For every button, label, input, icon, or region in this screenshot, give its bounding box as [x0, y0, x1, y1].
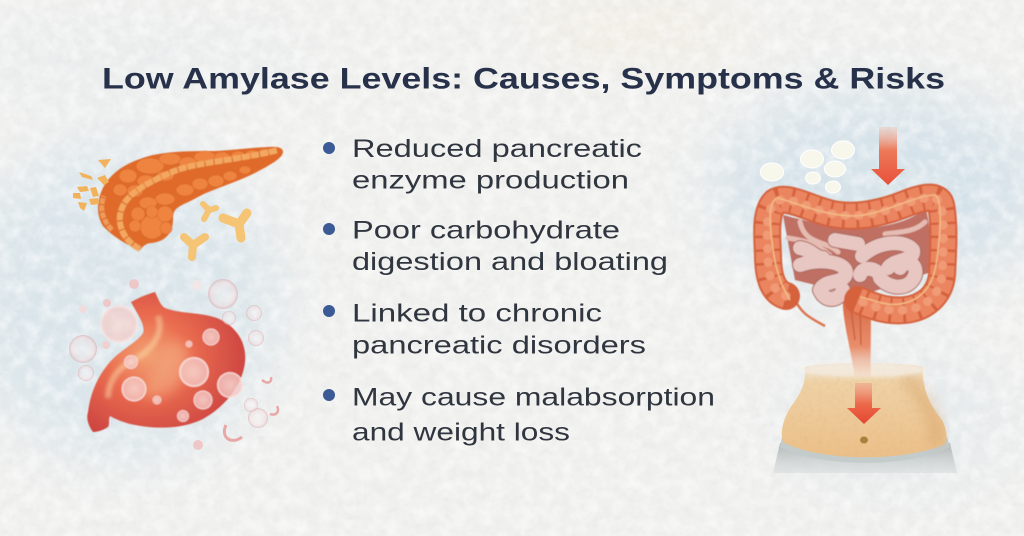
inner cavity [783, 208, 937, 296]
icon: abdomen [773, 363, 957, 473]
icon: enzyme fragments [73, 159, 111, 211]
bullet: enzyme production [323, 135, 642, 194]
bullet list [323, 135, 715, 446]
icon: pancreas [98, 147, 283, 250]
stomach bubbles [122, 328, 243, 422]
small intestine [788, 222, 925, 299]
floating bubbles [69, 279, 278, 450]
icon: intestines [767, 195, 943, 378]
rectum [843, 300, 871, 378]
icon: Y antibodies [184, 204, 247, 257]
bullet: malabsorption: May cause malabsorption [352, 384, 715, 412]
bullet: carbohydrate digestion [323, 216, 668, 276]
bullet: enzyme production: enzyme production [352, 166, 629, 194]
bullet: carbohydrate digestion: digestion and bloating [352, 248, 668, 276]
appendix [792, 294, 825, 326]
bullet: malabsorption [323, 384, 715, 446]
title: Low Amylase Levels: Causes, Symptoms & Risks [102, 62, 945, 96]
right Y [223, 213, 247, 238]
arrow: lower [847, 383, 881, 424]
icon: white particles [760, 141, 854, 193]
bullet: carbohydrate digestion: Poor carbohydrate [352, 216, 620, 244]
lobules [113, 148, 271, 239]
icon: stomach [87, 292, 245, 432]
lower Y [184, 237, 205, 257]
bullet: chronic disorders: pancreatic disorders [352, 332, 646, 360]
small Y [203, 204, 216, 219]
duct [120, 150, 278, 249]
bullet: chronic disorders [323, 300, 646, 360]
bullet: malabsorption: and weight loss [352, 418, 570, 446]
bullet: enzyme production: Reduced pancreatic [352, 135, 642, 163]
waistband [773, 443, 957, 473]
colon [767, 195, 943, 310]
bullet: chronic disorders: Linked to chronic [352, 300, 602, 328]
arrow: top [871, 127, 905, 185]
